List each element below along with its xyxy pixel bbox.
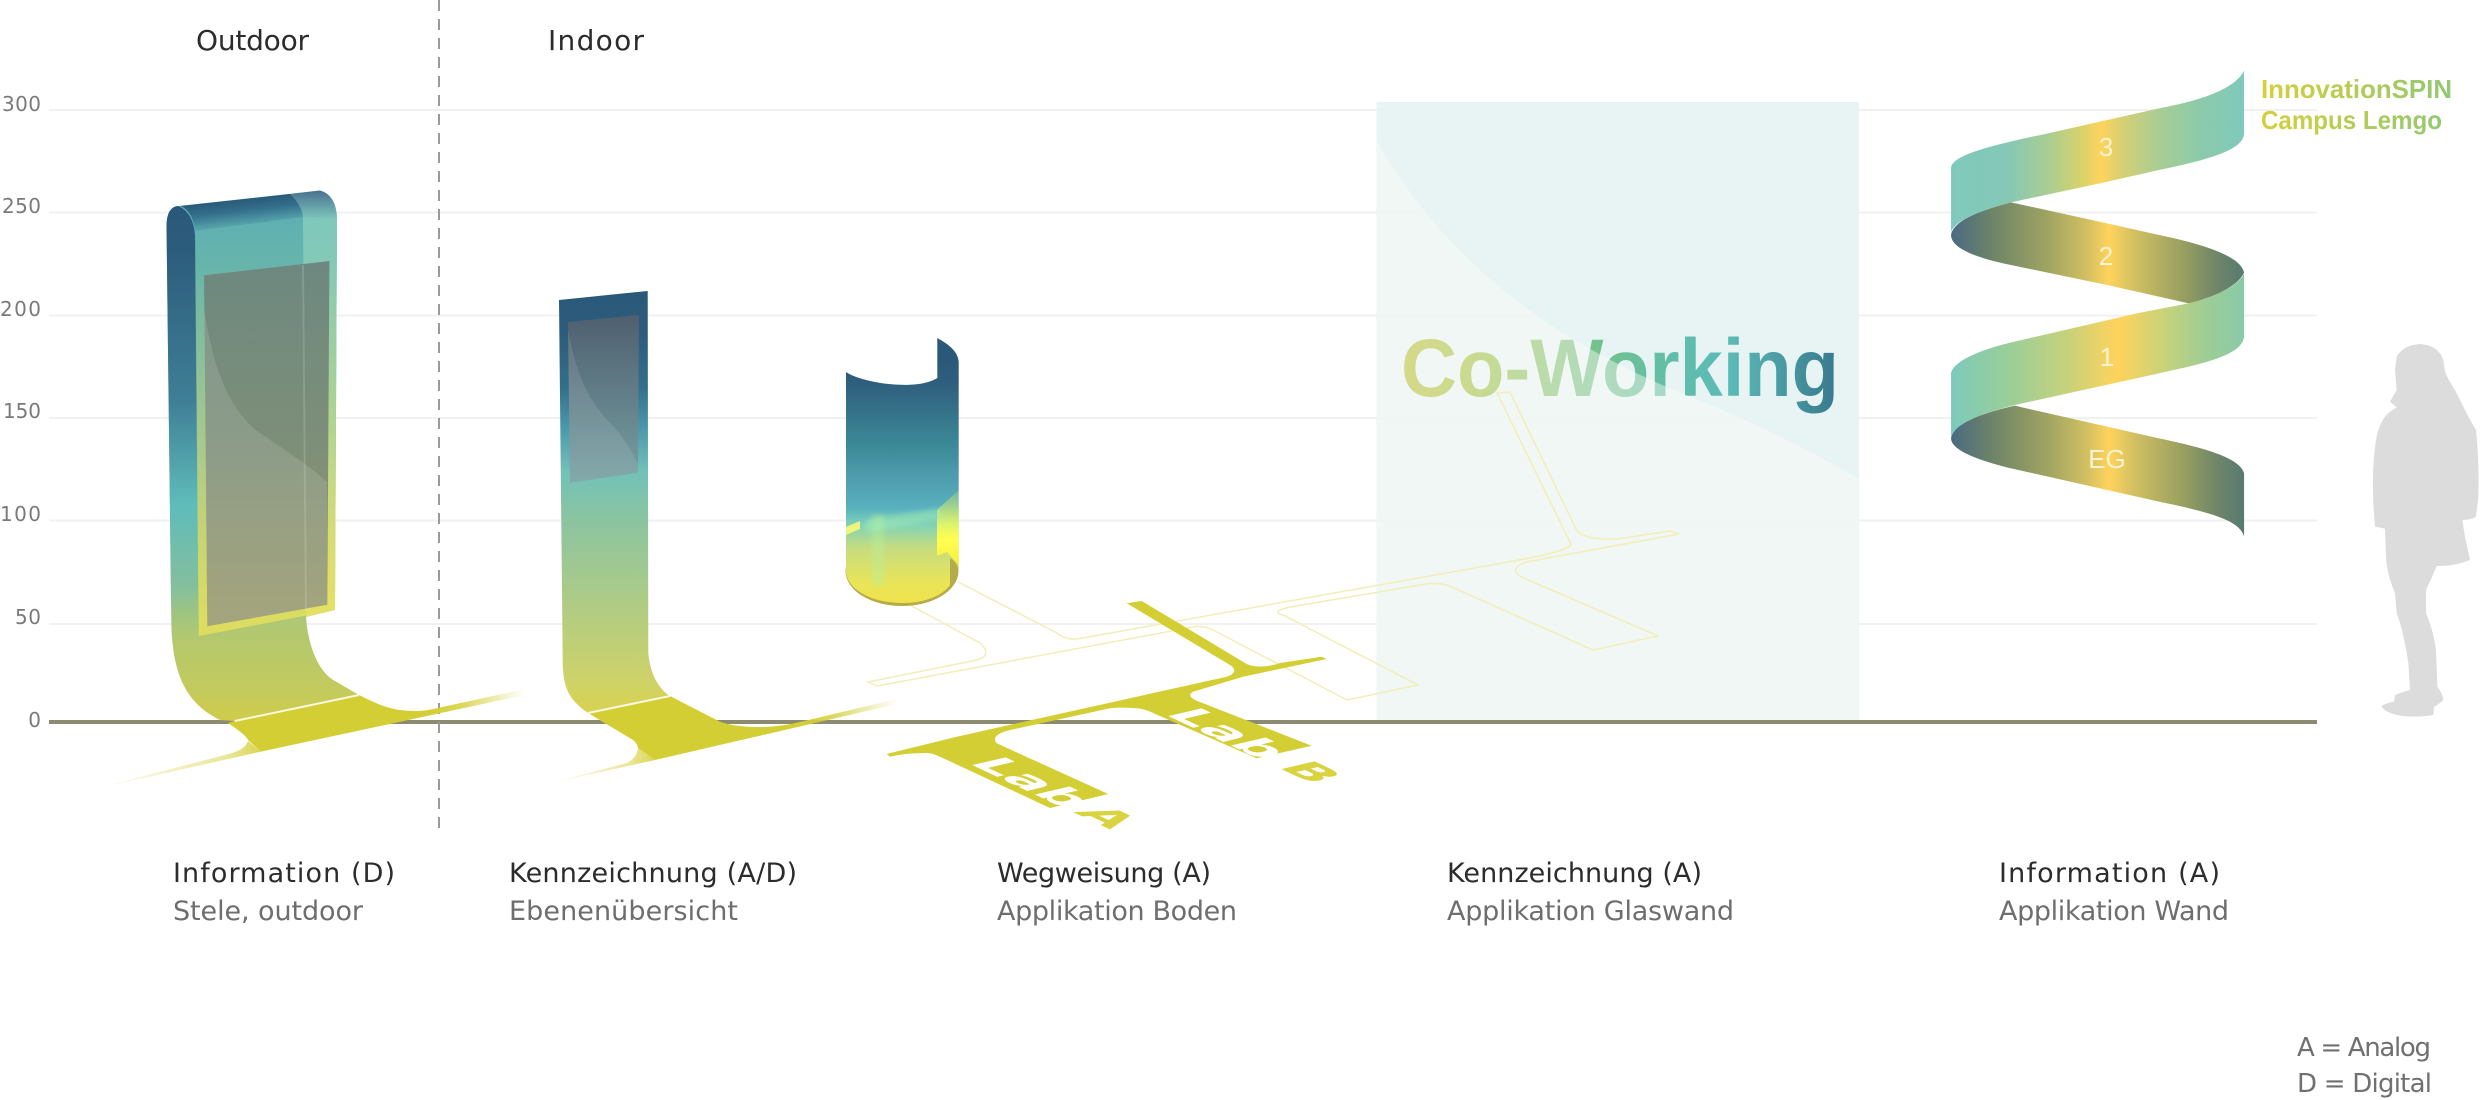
caption Information A: Applikation Wand <box>1999 896 2229 927</box>
ground line <box>49 720 2317 724</box>
wayfinding floor outline <box>868 392 1679 700</box>
outdoor / indoor divider <box>438 0 440 836</box>
floor label EG: EG <box>2088 444 2126 474</box>
height axis with grid and scale labels <box>0 92 2317 732</box>
Co-Working lettering: Co-Working <box>1401 323 1839 414</box>
display screen <box>204 261 329 626</box>
title InnovationSPIN Campus Lemgo <box>2261 74 2452 135</box>
caption Kennzeichnung A/D: Ebenenübersicht <box>509 896 738 927</box>
caption Wegweisung A: Applikation Boden <box>997 896 1237 927</box>
cylinder base rim <box>846 536 958 606</box>
axis label 50: 50 <box>15 605 41 629</box>
caption Information D: Stele, outdoor <box>173 896 364 927</box>
ribbon floor 3 <box>1951 71 2244 232</box>
axis label 150: 150 <box>3 399 41 423</box>
floor number 2: 2 <box>2099 241 2113 271</box>
heading Indoor: Indoor <box>548 24 644 57</box>
helix wall ribbon <box>1951 71 2244 537</box>
display frame <box>195 262 337 636</box>
vertical glow <box>872 515 884 585</box>
title InnovationSPIN Campus Lemgo: Campus Lemgo <box>2261 105 2442 135</box>
cylinder body <box>846 338 959 603</box>
caption Kennzeichnung A/D: Kennzeichnung (A/D) <box>509 858 797 889</box>
caption Wegweisung A: Wegweisung (A) <box>997 858 1211 889</box>
caption Kennzeichnung A/D <box>509 858 797 927</box>
ribbon floor 1 <box>1951 273 2244 437</box>
caption Information A: Information (A) <box>1999 858 2220 889</box>
legend <box>2297 1033 2432 1099</box>
axis label 300: 300 <box>2 92 41 116</box>
legend: D = Digital <box>2297 1069 2432 1099</box>
axis label 250: 250 <box>2 194 41 218</box>
person silhouette <box>2373 344 2479 717</box>
horizontal glow <box>865 508 940 532</box>
cylinder column <box>846 338 959 606</box>
letter A: A <box>1062 802 1152 832</box>
axis label 200: 200 <box>0 297 41 321</box>
stele indoor <box>551 291 897 783</box>
caption Information D <box>173 858 395 927</box>
caption Kennzeichnung A <box>1447 858 1734 927</box>
stele top right band <box>290 190 337 218</box>
heading Outdoor: Outdoor <box>196 24 309 57</box>
stele front body <box>166 190 359 721</box>
axis label 0: 0 <box>28 708 41 732</box>
caption Information D: Information (D) <box>173 858 395 889</box>
stele floor tail <box>90 741 261 790</box>
glass wall panel <box>1376 102 1859 721</box>
indoor display wave <box>568 330 638 483</box>
wayfinding Lab A and Lab B <box>887 601 1356 832</box>
stele outdoor <box>90 190 525 790</box>
screen wave highlight <box>204 309 327 626</box>
axis label 100: 100 <box>0 502 41 526</box>
letter B: B <box>1266 757 1356 787</box>
indoor display <box>568 315 639 483</box>
left stripe <box>846 521 860 535</box>
title InnovationSPIN Campus Lemgo: InnovationSPIN <box>2261 74 2452 104</box>
ribbon ground floor <box>1951 406 2244 537</box>
indoor floor tail <box>551 748 655 783</box>
caption Kennzeichnung A: Kennzeichnung (A) <box>1447 858 1702 889</box>
stele top band <box>181 194 303 231</box>
stele right panel <box>303 217 337 617</box>
corridor shape <box>887 601 1327 808</box>
ribbon floor 2 <box>1951 202 2244 303</box>
label Lab on arm B: Lab <box>1153 704 1303 762</box>
indoor stele body <box>559 291 670 713</box>
indoor floor foot <box>588 696 897 760</box>
stele floor foot <box>228 689 525 752</box>
floor number 3: 3 <box>2099 132 2113 162</box>
label Lab on arm A: Lab <box>957 753 1107 811</box>
caption Information A <box>1999 858 2229 927</box>
caption Wegweisung A <box>997 858 1237 927</box>
floor number 1: 1 <box>2100 342 2114 372</box>
stele left side <box>166 206 199 640</box>
right highlight <box>937 490 959 565</box>
legend: A = Analog <box>2297 1033 2431 1063</box>
caption Kennzeichnung A: Applikation Glaswand <box>1447 896 1734 927</box>
